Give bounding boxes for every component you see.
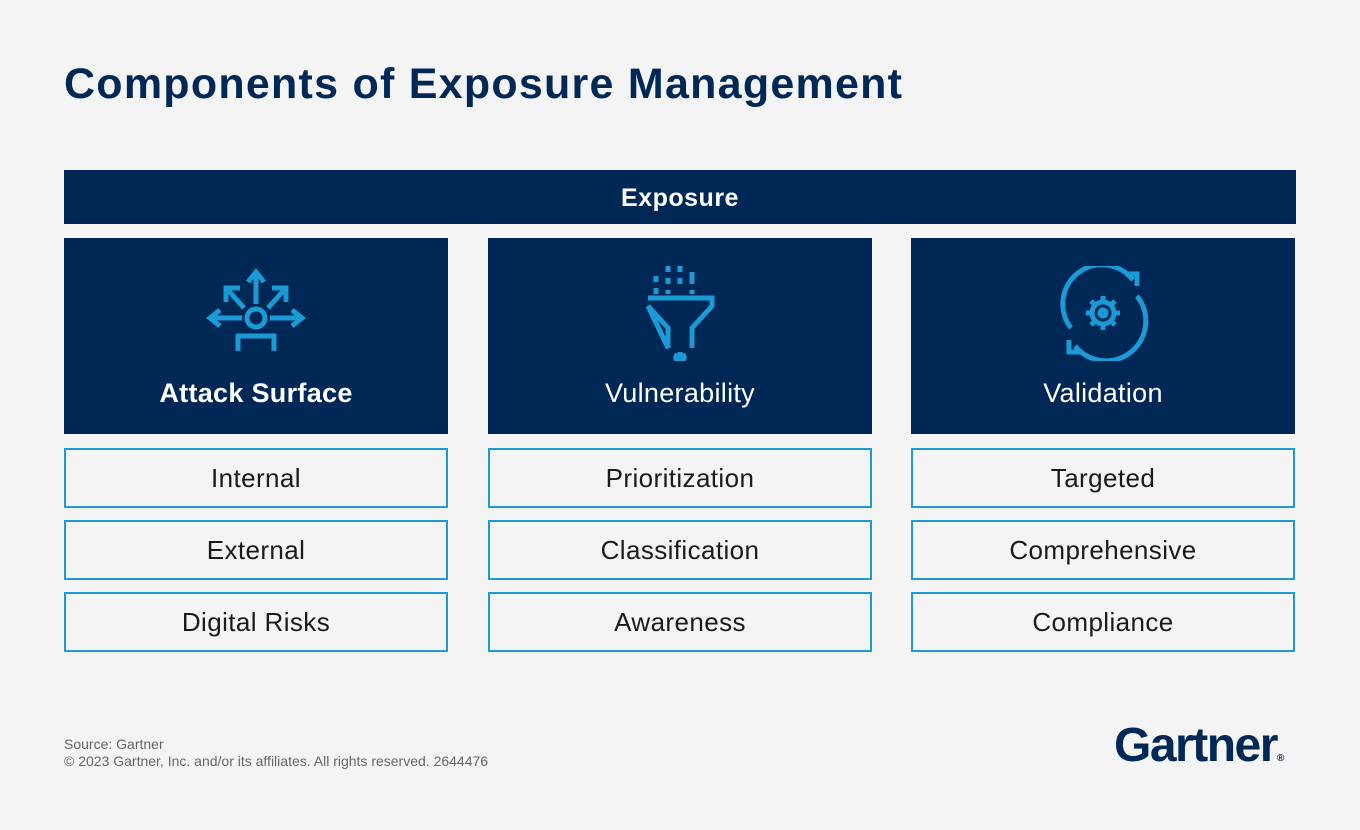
panel: attack surface bbox=[64, 238, 448, 434]
text: Compliance bbox=[1032, 607, 1174, 637]
panel: validation: Validation bbox=[1043, 378, 1163, 408]
text: Digital Risks bbox=[182, 607, 330, 637]
icon: cycle gear bbox=[1060, 266, 1148, 361]
text: External bbox=[207, 535, 305, 565]
footer source bbox=[64, 736, 488, 769]
boxes col2 bbox=[488, 448, 872, 508]
exposure band: Exposure bbox=[621, 184, 739, 212]
icon: funnel bbox=[646, 266, 714, 361]
boxes col3: Targeted bbox=[1051, 463, 1155, 493]
text: Comprehensive bbox=[1009, 535, 1197, 565]
panel: vulnerability: Vulnerability bbox=[605, 378, 755, 408]
panel: attack surface: Attack Surface bbox=[159, 378, 353, 408]
boxes col3 bbox=[911, 448, 1295, 508]
footer source: Source: Gartner bbox=[64, 736, 164, 752]
footer source: © 2023 Gartner, Inc. and/or its affiliates. All rights reserved. 2644476 bbox=[64, 753, 488, 769]
boxes col1 bbox=[64, 448, 448, 508]
text: Awareness bbox=[614, 607, 746, 637]
panel: vulnerability bbox=[488, 238, 872, 434]
icon: attack surface bbox=[206, 268, 306, 351]
title: Components of Exposure Management bbox=[64, 60, 903, 108]
text: Classification bbox=[601, 535, 759, 565]
boxes col1: Internal bbox=[211, 463, 301, 493]
boxes col2: Prioritization bbox=[606, 463, 754, 493]
exposure band bbox=[64, 170, 1296, 224]
logo: Gartner® bbox=[1114, 719, 1283, 772]
panel: validation bbox=[911, 238, 1295, 434]
